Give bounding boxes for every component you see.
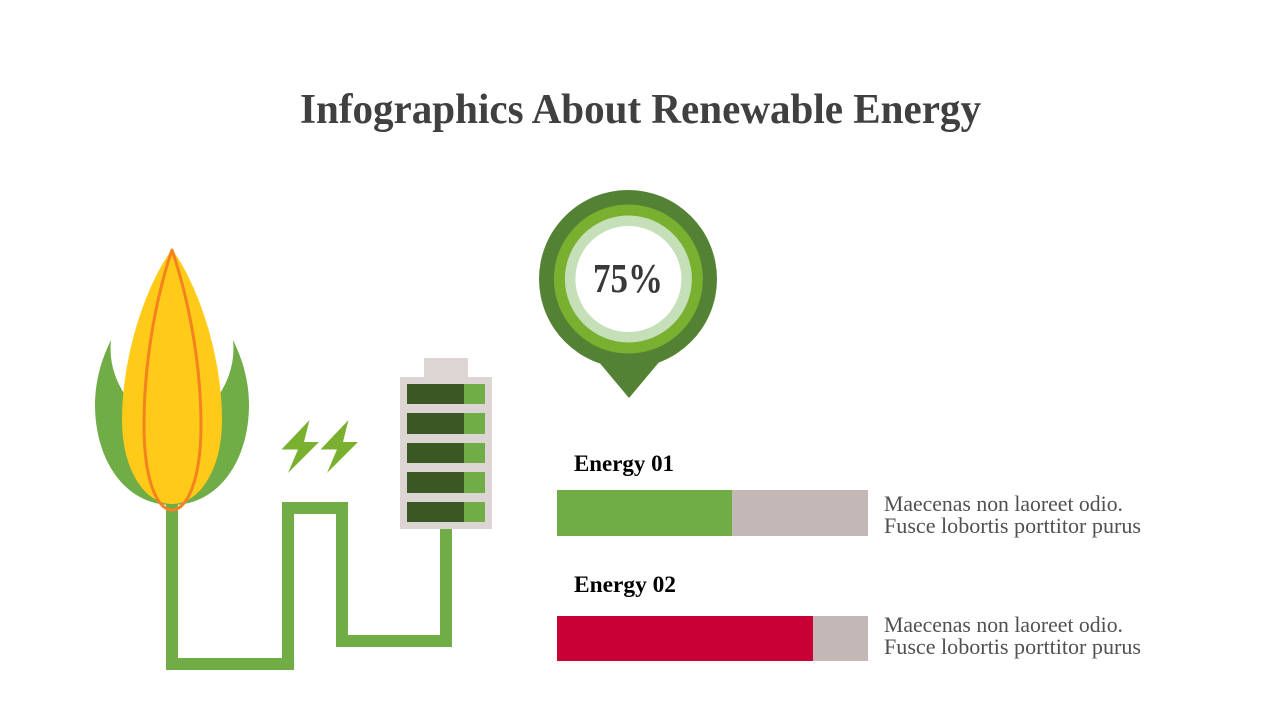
text block: Energy 01: Maecenas non laoreet odio. xyxy=(884,491,1123,516)
icon: lightning bolts xyxy=(282,420,358,473)
bar: Energy 01 xyxy=(557,490,868,536)
yellow flame xyxy=(122,249,222,504)
text block: Energy 02: Maecenas non laoreet odio. xyxy=(884,612,1123,637)
icon: plant flame bud xyxy=(95,249,249,510)
right leaf xyxy=(172,340,249,505)
orange outline xyxy=(144,250,201,510)
text block: Energy 02 xyxy=(884,612,1141,659)
heading: Energy 02: Energy 02 xyxy=(574,572,676,598)
title: Infographics About Renewable Energy xyxy=(300,87,981,133)
text block: Energy 02: Fusce lobortis porttitor purus xyxy=(884,634,1141,659)
percentage value: 75% xyxy=(593,255,663,301)
icon: power cable xyxy=(172,500,446,664)
heading: Energy 01: Energy 01 xyxy=(574,451,674,477)
text block: Energy 01: Fusce lobortis porttitor purus xyxy=(884,513,1141,538)
map pin 75 percent xyxy=(539,190,717,398)
bar: Energy 02 xyxy=(557,616,868,661)
left leaf xyxy=(95,340,172,505)
text block: Energy 01 xyxy=(884,491,1141,538)
icon: battery xyxy=(400,358,492,529)
